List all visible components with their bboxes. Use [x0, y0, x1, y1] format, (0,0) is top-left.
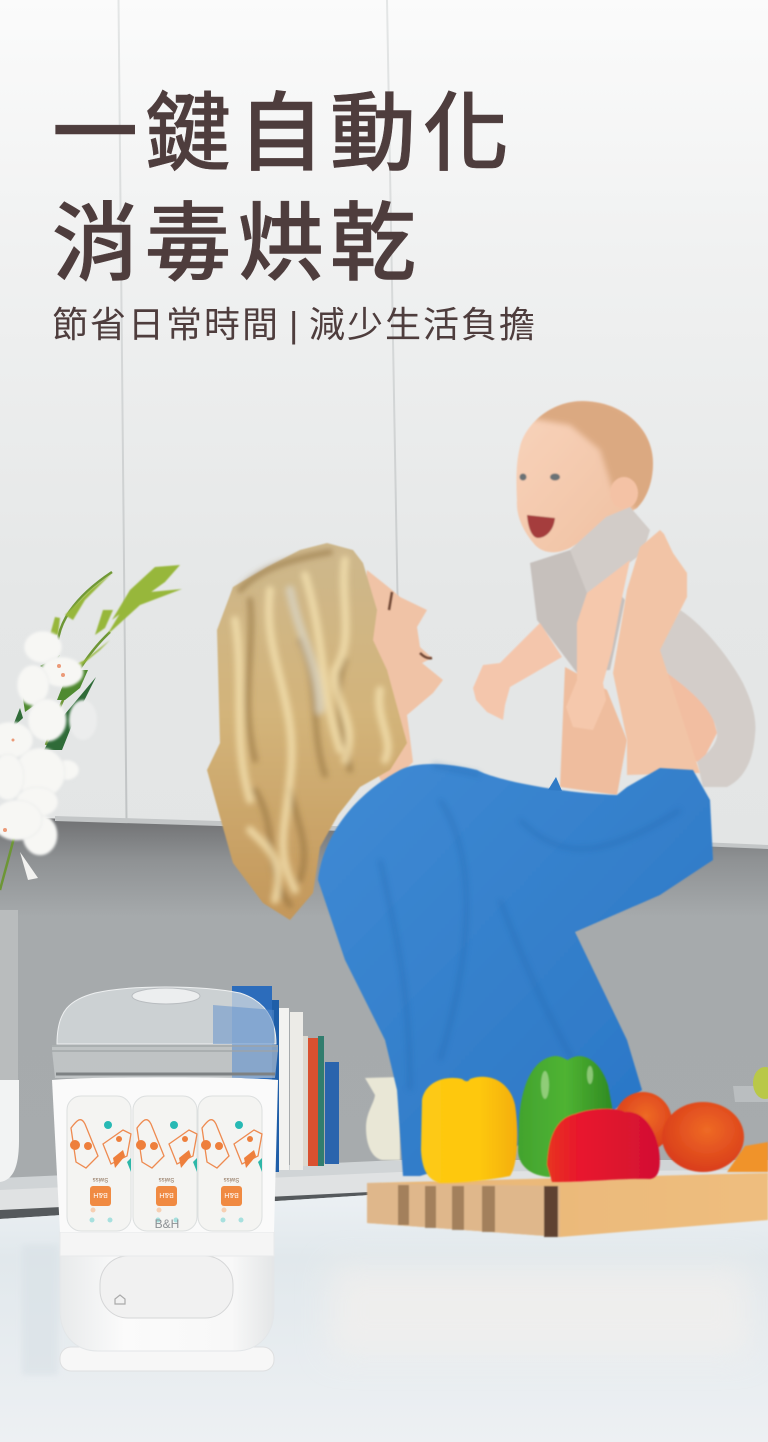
dark leaf [12, 677, 96, 750]
eye and mouth [389, 592, 432, 658]
clear tray [52, 1045, 278, 1078]
table top [0, 1180, 768, 1442]
base plate [60, 1347, 274, 1371]
onesie sleeve [570, 507, 650, 593]
bottle chamber [52, 1077, 278, 1232]
blossom centers [3, 664, 65, 832]
lid knob [132, 988, 200, 1004]
baby near arm and hand [566, 560, 630, 730]
cabinet bottom lip [55, 816, 768, 849]
back sleeve edge [548, 777, 562, 791]
red pepper [547, 1109, 660, 1182]
vegetables [421, 1056, 768, 1183]
brand mark: B&H [155, 1217, 179, 1231]
mother's raised arm and hand [613, 530, 700, 775]
orange tomato [614, 1092, 672, 1152]
title: 消毒烘乾 [52, 196, 416, 292]
board stripes section [367, 1183, 560, 1237]
books [232, 986, 339, 1172]
bottles [67, 1096, 262, 1231]
baby hair [535, 400, 654, 510]
hair [207, 543, 407, 920]
title: 一鍵自動化 [52, 86, 509, 182]
white blossoms [0, 631, 97, 855]
hair strands [235, 552, 388, 905]
backsplash [0, 816, 768, 1190]
baby ear [610, 477, 638, 509]
cutting board [367, 1173, 768, 1237]
baby eyes [520, 474, 560, 480]
product: bottle sterilizer [52, 987, 278, 1371]
back counter shelf [0, 1160, 768, 1220]
pepper highlights [541, 1066, 593, 1099]
ribbed collar [60, 1232, 274, 1256]
lime buds [50, 565, 182, 668]
red tomato [662, 1102, 744, 1172]
subtitle: 節省日常時間|減少生活負擔 [52, 304, 535, 345]
woman [207, 543, 713, 1176]
control window [100, 1256, 233, 1318]
green leaves [22, 655, 88, 712]
baby mouth [527, 515, 555, 538]
stems [0, 572, 112, 890]
background: kitchen wall cabinets [0, 0, 768, 850]
carrot slices [727, 1142, 768, 1172]
lower onesie [650, 610, 755, 787]
home icon [115, 1295, 125, 1304]
far arm and hand [473, 623, 562, 720]
baby [473, 398, 755, 795]
yellow pepper [421, 1077, 517, 1183]
baby head [516, 401, 653, 552]
white jug [365, 1077, 400, 1160]
onesie torso [530, 550, 625, 673]
lower body [60, 1254, 274, 1351]
right shelf items [733, 1067, 768, 1102]
title [52, 86, 509, 292]
face and neck [345, 570, 443, 790]
shirt folds [380, 765, 680, 1090]
clear dome lid [57, 987, 276, 1044]
baby far leg and thigh [560, 667, 627, 795]
flowers [0, 565, 182, 890]
green pepper [518, 1056, 613, 1177]
vase [0, 910, 19, 1182]
shirt [318, 764, 713, 1176]
